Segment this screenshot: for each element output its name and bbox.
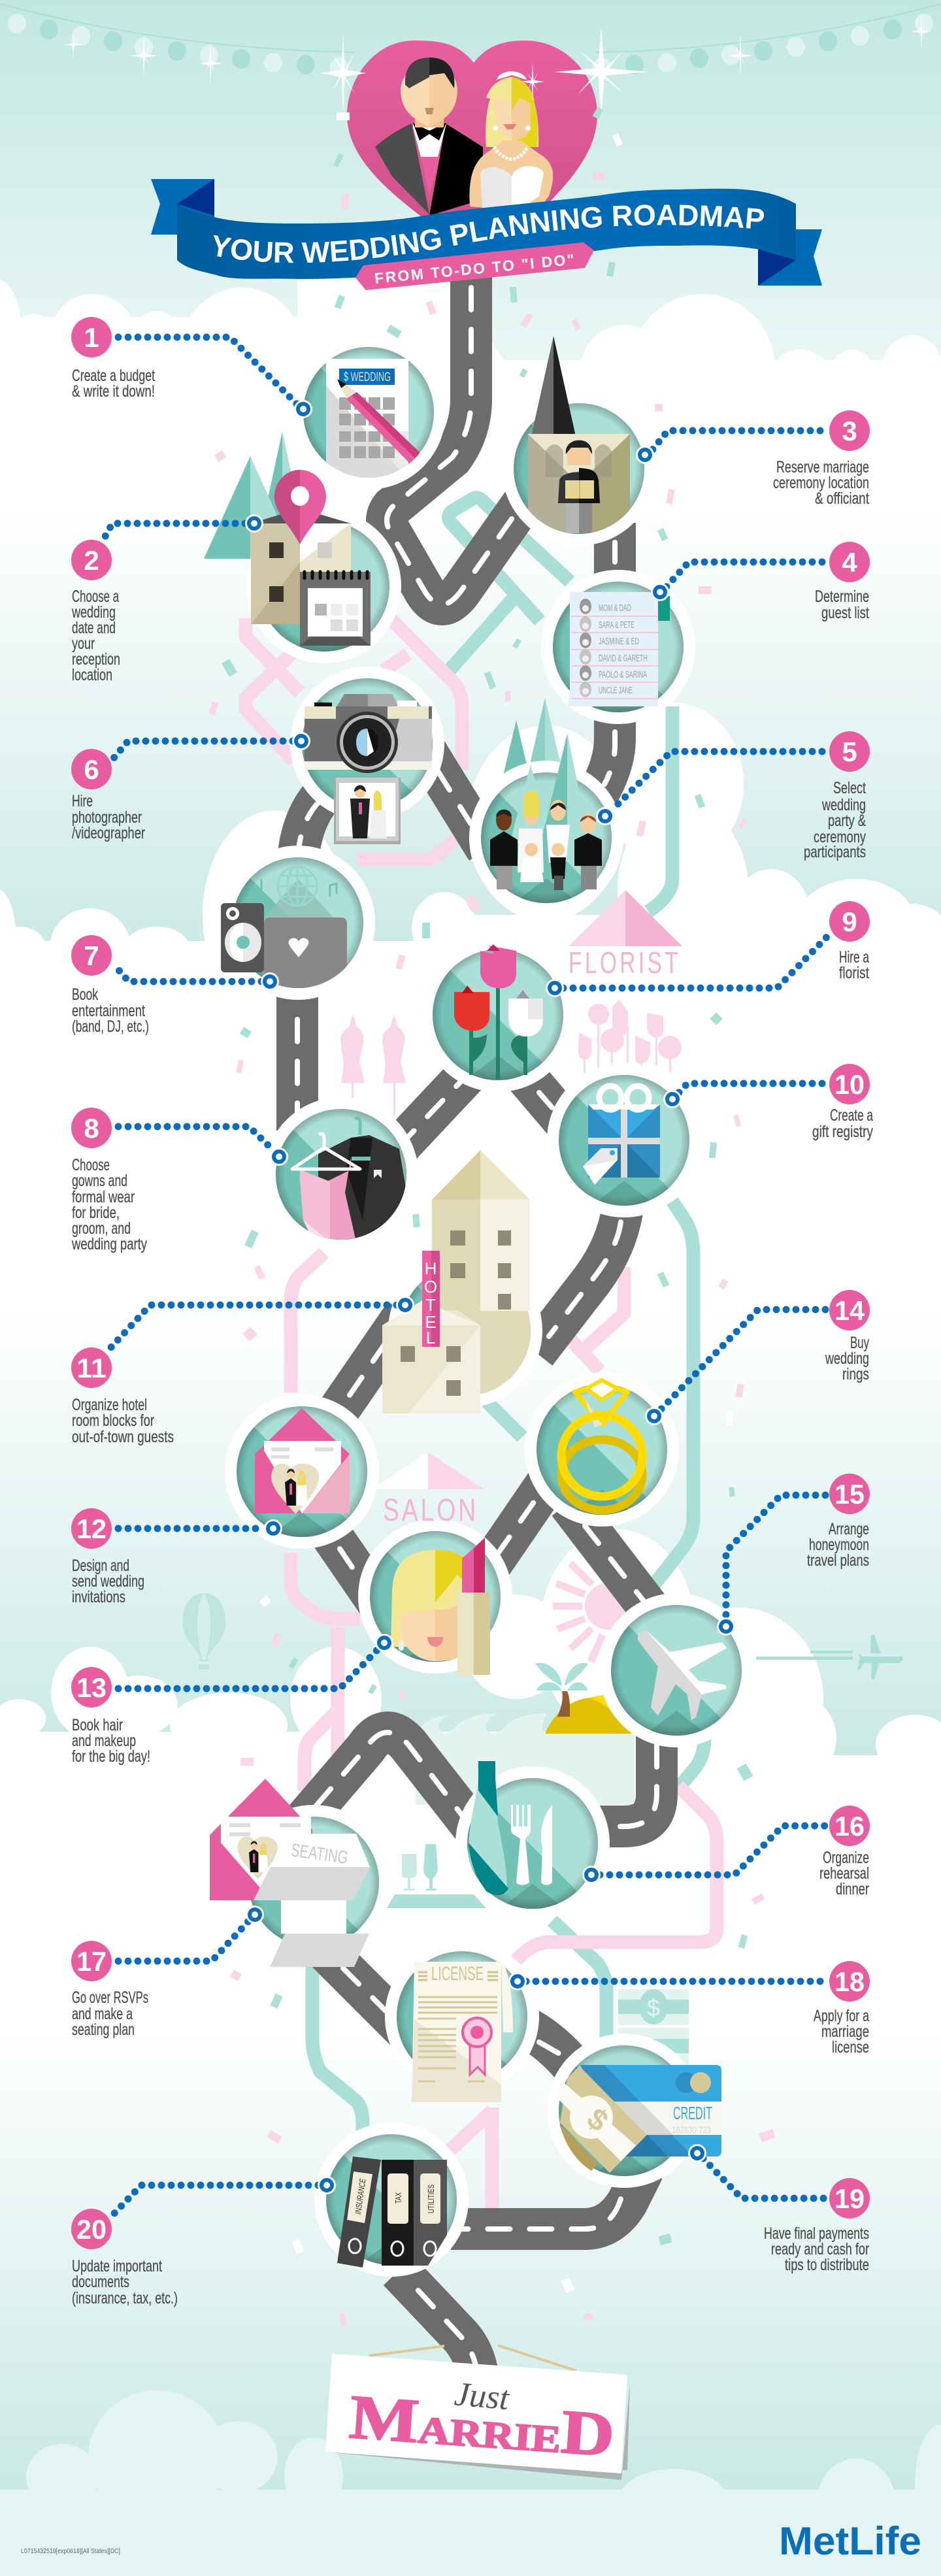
connector: step 10 [663,1083,822,1108]
step 19 credit card and cash: $ [581,2101,615,2138]
step 19 credit card and cash: CREDIT [673,2103,712,2123]
step 7 label: (band, DJ, etc.) [72,1017,149,1036]
step 6 label: /videographer [72,824,145,842]
step 11 label [71,1347,174,1446]
step 7 entertainment [221,846,375,1000]
step 14 label [825,1290,870,1383]
step 7 label: Book [72,985,98,1004]
step 16 label: Organize [823,1849,869,1867]
step 17 label: 17 [76,1946,107,1977]
groom [375,58,483,216]
connector: step 19 [688,2144,825,2198]
step 18 license: LICENSE [431,1963,484,1985]
connector: step 8 [118,1127,288,1166]
step 17 seating: SEATING [289,1840,350,1868]
step 9 tulips [421,938,575,1092]
step 18 label: marriage [821,2023,869,2041]
step 2 label [71,540,120,684]
subtitle ribbon [355,242,594,290]
step 19 label [764,2178,870,2274]
connector: step 3 [636,431,820,464]
step 17 label: and make a [72,2005,133,2023]
step 20 binders: INSURANCE [353,2178,368,2215]
step 1 budget calculator [303,347,443,489]
step 20 binders: UTILITIES [426,2185,436,2213]
step 17 label: Go over RSVPs [72,1989,148,2007]
step 12 label: 12 [76,1513,107,1544]
step 1 budget calculator: $ WEDDING [344,371,391,384]
step 20 label [71,2209,178,2307]
step 5 wedding party [469,698,623,915]
step 3 label [773,410,870,508]
connector: step 11 [108,1296,414,1350]
step 3 label: 3 [842,416,857,446]
step 3 label: ceremony location [773,474,869,492]
step 9 label [829,901,870,982]
clouds: middle band [0,702,941,1320]
step 14 label: rings [842,1365,869,1383]
step 12 label: invitations [72,1588,125,1606]
step 5 label: wedding [821,796,866,814]
step 16 label: 16 [834,1811,865,1841]
step 5 label [804,731,870,861]
step 4 guest list: SARA & PETE [599,619,635,631]
step 10 gift [547,1063,701,1217]
step 4 guest list [541,570,695,724]
step 19 credit card and cash: 182830 723 [672,2124,711,2136]
connector: step 15 [717,1495,825,1636]
step 11 hotel: O [424,1277,437,1296]
salon tent [372,1452,484,1528]
step 10 label: 10 [834,1069,865,1100]
step 10 label: Create a [830,1106,873,1125]
connector: step 18 [508,1972,822,1990]
Just Married sign: MARRIED [348,2382,617,2469]
step 7 label: 7 [84,940,99,971]
step 8 gowns and suit [276,1098,417,1248]
step 9 label: 9 [842,906,857,937]
step 11 hotel: T [425,1295,436,1315]
step 5 label: 5 [842,736,857,767]
step 11 hotel: E [425,1312,437,1332]
step 16 label: dinner [836,1880,869,1898]
step 4 guest list: MOM & DAD [599,603,631,614]
step 11 label: out-of-town guests [72,1428,174,1446]
connector: step 17 [118,1906,264,1961]
connector: step 2 [103,514,263,540]
step 11 hotel: L [426,1328,435,1347]
pale pink dress forms [340,1014,406,1115]
step 1 label: Create a budget [72,367,155,385]
step 4 guest list: DAVID & GARETH [599,653,648,664]
step 14 label: 14 [834,1295,865,1326]
step 19 label: 19 [834,2183,865,2214]
step 16 label: rehearsal [819,1864,869,1883]
step 8 label: for bride, [72,1204,120,1222]
step 5 label: party & [828,812,866,830]
hot-air balloon [182,1593,225,1670]
step 13 label: 13 [76,1672,107,1703]
step 13 label: for the big day! [72,1747,150,1766]
step 19 label: tips to distribute [785,2256,869,2274]
step 2 label: wedding [71,603,116,621]
step 9 label: Hire a [839,948,869,966]
step 14 label: wedding [825,1349,869,1368]
step 2 label: date and [72,619,116,637]
title ribbon: YOUR WEDDING PLANNING ROADMAP [213,205,765,263]
step 4 guest list: PAOLO & SARINA [599,669,647,680]
connector: step 9 [546,937,827,997]
Just Married sign [325,2345,630,2480]
step 1 label: 1 [84,322,99,353]
step 11 hotel: H [425,1259,437,1278]
connector: step 14 [645,1310,825,1425]
step 11 label: room blocks for [72,1412,154,1430]
step 2 reception location and date [204,431,401,663]
step 3 label: & officiant [815,489,869,508]
step 18 label [814,1961,870,2056]
step 20 label: (insurance, tax, etc.) [72,2289,178,2307]
step 15 label: 15 [834,1479,865,1510]
distant airplane [756,1635,903,1679]
step 8 label: formal wear [72,1188,135,1206]
step 17 label: seating plan [72,2021,135,2039]
step 14 label: Buy [850,1334,869,1352]
step 4 guest list: JASMINE & ED [599,636,639,647]
step 15 label [807,1474,870,1570]
step 8 label: Choose [72,1156,110,1174]
step 4 label [815,542,870,622]
step 13 label: and makeup [72,1732,136,1750]
road segments [288,258,657,2385]
background teal route lines [312,498,704,2150]
legal code: L0715432519[exp0618][All States][DC] [21,2548,120,2555]
connector: step 1 [118,337,312,418]
connector: step 7 [115,966,279,991]
step 11 label: Organize hotel [72,1396,147,1414]
step 13 label: Book hair [72,1716,123,1734]
heart [347,41,597,222]
connector: step 4 [651,562,822,601]
step 19 label: ready and cash for [771,2240,869,2258]
step 8 label: gowns and [72,1172,127,1190]
step 2 label: 2 [84,545,99,576]
step 2 label: your [72,635,95,653]
step 7 label [71,935,149,1036]
step 12 label [71,1508,144,1606]
step 15 label: honeymoon [809,1536,869,1554]
step 8 label: groom, and [72,1219,131,1238]
step 2 label: Choose a [72,587,119,606]
step 15 airplane [599,1593,753,1747]
step 2 label: reception [72,650,120,669]
step 12 label: Design and [72,1557,129,1575]
step 14 rings [525,1372,679,1527]
step 3 church and officiant [506,336,644,544]
bride [469,71,553,216]
step 16 rehearsal dinner [455,1761,610,1921]
light teal water with waves behind island [416,1713,635,1805]
step 1 label: & write it down! [72,382,155,401]
step 15 label: Arrange [829,1520,869,1538]
title ribbon [151,179,822,286]
step 8 label: wedding party [71,1235,147,1253]
step 17 seating [210,1779,391,1967]
Just Married sign: Just [453,2375,512,2417]
money bills: $ [647,1994,660,2021]
step 11 label: 11 [76,1353,107,1383]
step 18 license [385,1940,539,2102]
connector: step 6 [114,732,310,758]
table [387,1894,486,1908]
step 3 label: Reserve marriage [776,458,869,476]
step 18 label: 18 [834,1966,865,1997]
pale pink flowers [578,1000,682,1073]
step 1 label [71,317,155,401]
step 4 guest list: UNCLE JANE [599,685,633,696]
MetLife logo: MetLife [779,2519,921,2563]
step 19 label: Have final payments [764,2224,869,2243]
florist tent [569,890,682,980]
step 5 label: Select [833,779,866,797]
step 4 label: Determine [815,587,869,606]
step 20 label: documents [72,2273,129,2291]
step 13 salon face and lipstick [358,1519,512,1675]
step 6 label: photographer [72,808,142,827]
step 2 label: location [72,666,112,684]
step 16 label [819,1806,870,1898]
step 20 label: 20 [76,2214,107,2245]
step 9 label: florist [839,964,869,982]
background pink route lines [246,618,717,2219]
step 19 credit card and cash [547,2034,721,2188]
step 10 label: gift registry [812,1123,873,1141]
clouds: lower band [0,1529,941,2032]
step 18 label: Apply for a [814,2007,869,2025]
step 20 label: Update important [72,2257,162,2275]
step 11 hotel [382,1150,542,1413]
title light strings [0,4,941,77]
step 5 label: ceremony [814,828,866,846]
step 15 label: travel plans [807,1551,869,1570]
florist tent: FLORIST [569,946,681,980]
subtitle ribbon: FROM TO-DO TO "I DO" [374,250,576,287]
wine glasses [402,1844,438,1891]
step 18 label: license [832,2038,869,2056]
step 13 label [71,1667,150,1766]
step 20 binders: TAX [393,2192,403,2204]
step 6 label [71,749,145,842]
sparkles [63,14,931,117]
clouds: top band [0,278,941,513]
clouds: bottom band [0,2390,941,2576]
step 6 label: 6 [84,754,99,785]
connector: step 12 [118,1519,282,1538]
connector: step 20 [114,2176,336,2214]
connector: step 5 [596,751,822,825]
step 10 label [812,1064,873,1141]
island and palm [535,1663,670,1734]
step 4 label: guest list [821,604,869,622]
step 17 label [71,1941,148,2039]
step 12 label: send wedding [72,1572,144,1591]
step 8 label [71,1108,147,1253]
step 4 label: 4 [842,547,857,578]
step 7 label: entertainment [72,1002,145,1020]
step 12 invitations [225,1395,379,1549]
sun [553,1563,632,1662]
salon tent: SALON [383,1493,478,1528]
step 20 binders [314,2122,469,2277]
step 5 label: participants [804,843,866,861]
connector: step 16 [582,1826,825,1884]
step 6 label: Hire [72,792,93,810]
step 6 camera and photo [290,667,444,844]
step 8 label: 8 [84,1113,99,1144]
money bills [618,1989,689,2067]
connector: step 13 [118,1634,393,1689]
confetti [209,107,776,2328]
